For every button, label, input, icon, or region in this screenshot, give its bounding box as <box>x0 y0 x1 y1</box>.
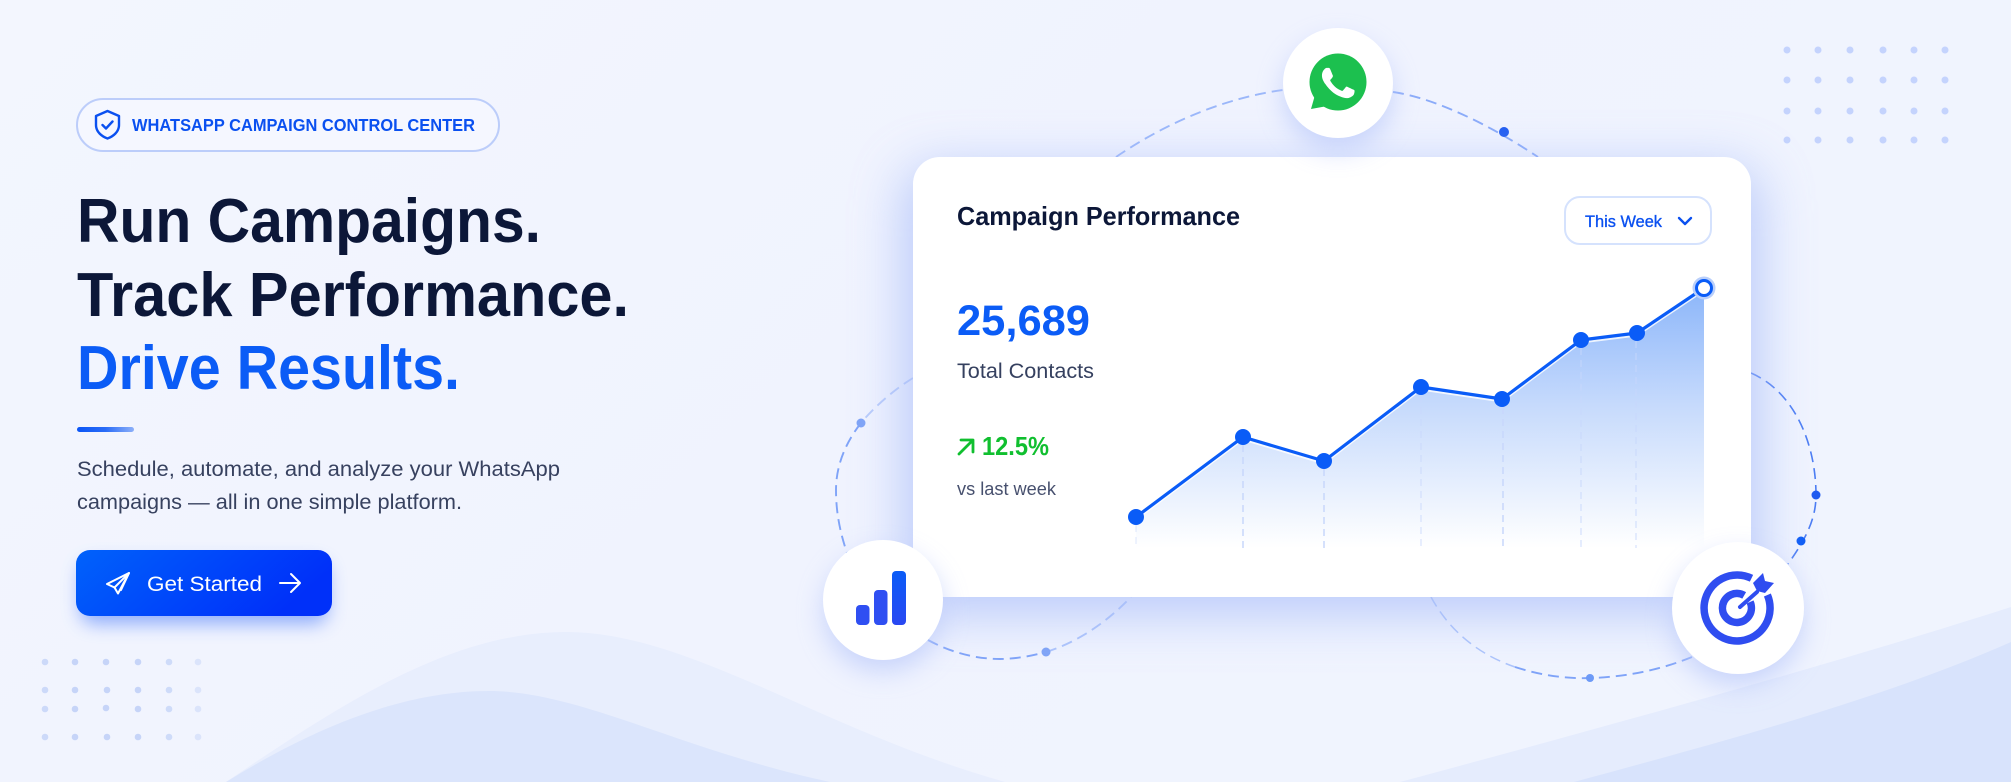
button: get started <box>76 550 332 624</box>
chart line <box>1136 288 1704 520</box>
chart points <box>1128 325 1645 525</box>
orbit dots <box>856 127 1820 682</box>
icon: bars <box>856 571 906 625</box>
chart guide lines <box>1136 341 1636 548</box>
card title: Campaign Performance <box>957 201 1240 231</box>
dropdown: this week: This Week <box>1585 212 1662 231</box>
button label: Get Started <box>147 573 262 596</box>
headline: Run Campaigns. <box>77 187 541 256</box>
stat: weekly growth: 12.5% <box>982 431 1049 461</box>
chart end point <box>1692 276 1716 300</box>
background waves left <box>226 632 1005 782</box>
stat: weekly growth <box>957 431 1057 499</box>
dashed orbit lines <box>836 90 1816 678</box>
background waves right <box>1400 607 2011 782</box>
badge text: WHATSAPP CAMPAIGN CONTROL CENTER <box>132 115 475 135</box>
headline <box>77 187 629 403</box>
panel: campaign performance card <box>903 157 1761 615</box>
icon badge: target <box>1672 542 1804 686</box>
dropdown: this week <box>1565 197 1711 244</box>
icon: arrow right <box>280 574 300 592</box>
stat: total contacts: Total Contacts <box>957 360 1094 383</box>
dot grid top right <box>1784 46 1948 144</box>
description text: campaigns — all in one simple platform. <box>77 490 462 514</box>
dot grid bottom left <box>42 659 201 740</box>
icon badge: whatsapp <box>1283 28 1393 150</box>
line chart <box>1128 276 1716 548</box>
icon: whatsapp logo <box>1310 54 1366 110</box>
accent divider <box>77 427 134 432</box>
icon badge: bar chart <box>823 540 943 672</box>
headline: Drive Results. <box>77 334 460 403</box>
description text: Schedule, automate, and analyze your WhatsApp <box>77 457 560 481</box>
stat: weekly growth: vs last week <box>957 478 1057 499</box>
icon: target with arrow <box>1704 573 1774 641</box>
icon: paper plane <box>107 573 129 594</box>
icon: shield check <box>96 111 119 138</box>
stat: total contacts <box>957 297 1094 383</box>
stat: total contacts: 25,689 <box>957 297 1090 345</box>
description text <box>77 457 560 514</box>
badge: campaign control center <box>77 99 499 151</box>
chart area fill <box>1136 288 1704 548</box>
headline: Track Performance. <box>77 261 629 330</box>
